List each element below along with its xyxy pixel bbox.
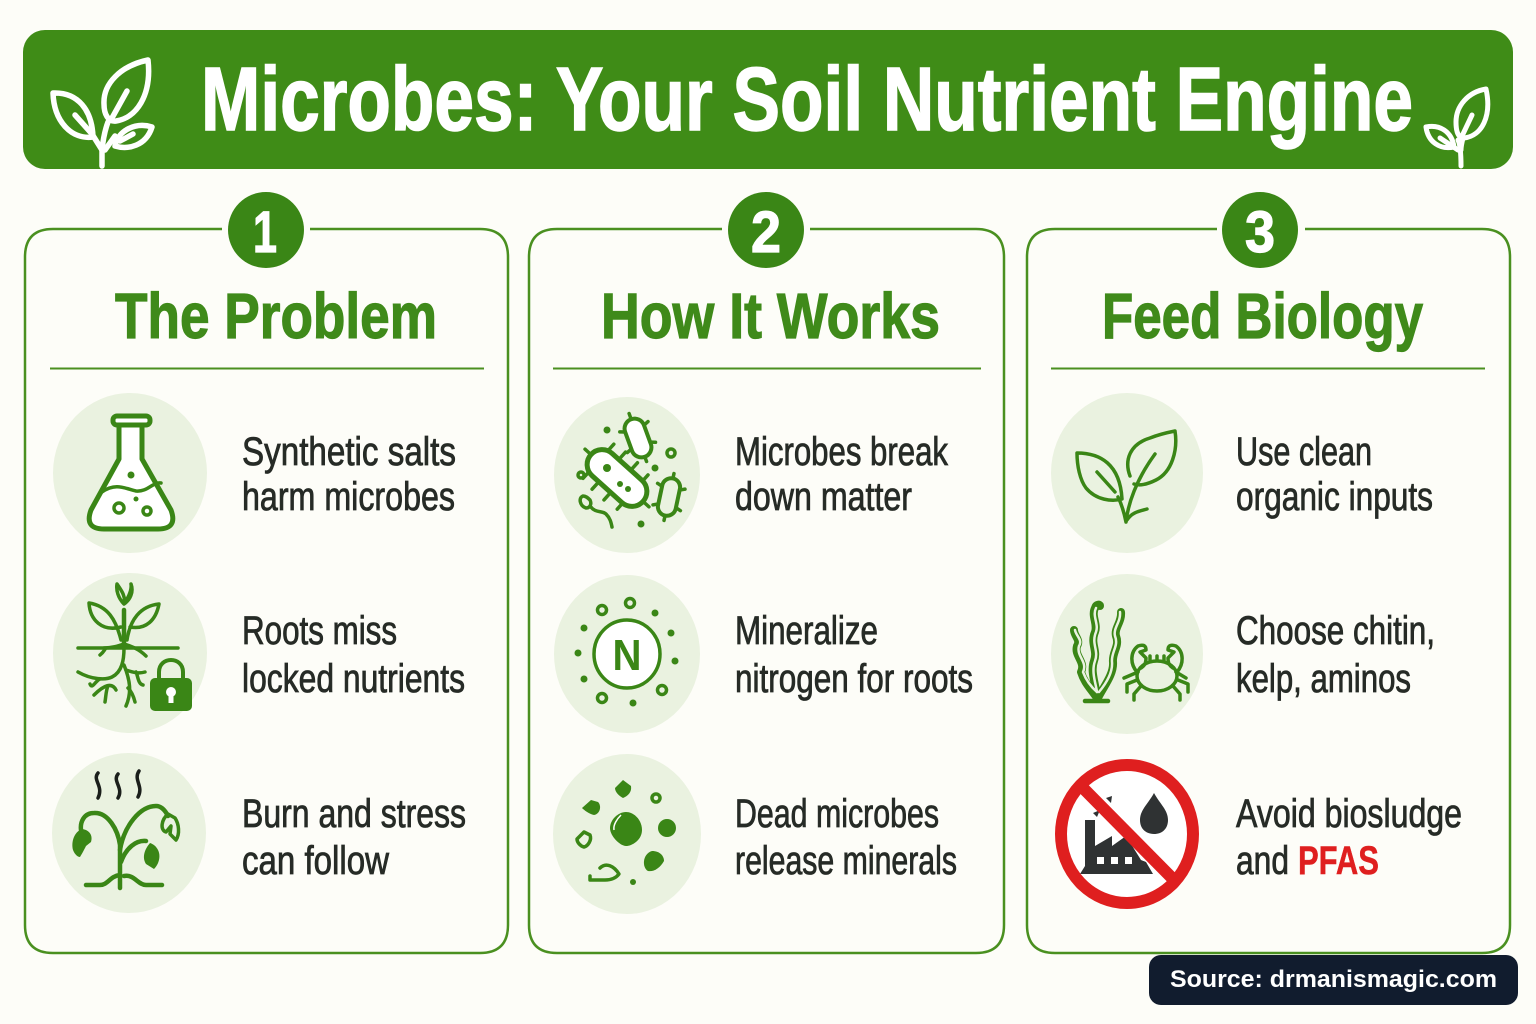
text: use clean: Use clean bbox=[1236, 430, 1372, 474]
text: choose chitin bbox=[1236, 609, 1435, 701]
source badge bbox=[1149, 955, 1518, 1005]
text: use clean bbox=[1236, 430, 1433, 519]
text: dead microbes: Dead microbes bbox=[735, 792, 939, 836]
text: microbes break bbox=[735, 430, 949, 519]
icon: no factory or sludge bbox=[1061, 765, 1193, 903]
icon: minerals bbox=[553, 754, 701, 914]
panel frame bbox=[529, 229, 1004, 953]
text: microbes break: Microbes break bbox=[735, 430, 949, 474]
panel: feed biology bbox=[1027, 192, 1510, 953]
text: microbes break: down matter bbox=[735, 475, 912, 519]
panel: the problem bbox=[25, 192, 508, 953]
text: synthetic salts: harm microbes bbox=[242, 475, 455, 519]
text: avoid biosludge bbox=[1236, 792, 1462, 883]
icon: flask bbox=[53, 393, 207, 553]
text: choose chitin: kelp, aminos bbox=[1236, 657, 1411, 701]
icon: kelp and crab bbox=[1051, 574, 1203, 734]
number badge 1 bbox=[228, 192, 304, 268]
heading: feed biology: Feed Biology bbox=[1102, 280, 1423, 352]
number badge 3: 3 bbox=[1245, 200, 1275, 265]
text: choose chitin: Choose chitin, bbox=[1236, 609, 1435, 653]
text: avoid biosludge: and bbox=[1236, 839, 1289, 883]
title banner bbox=[23, 30, 1513, 169]
panel frame bbox=[25, 229, 508, 953]
icon: nitrogen: N bbox=[612, 631, 642, 680]
icon: bacteria bbox=[554, 397, 700, 553]
text: mineralize: nitrogen for roots bbox=[735, 657, 973, 701]
number badge 1: 1 bbox=[253, 200, 277, 265]
text: mineralize bbox=[735, 609, 973, 701]
text: burn and stress bbox=[242, 792, 466, 883]
icon: nitrogen bbox=[554, 575, 700, 733]
number badge 2 bbox=[728, 192, 804, 268]
text: roots miss: locked nutrients bbox=[242, 657, 465, 701]
panel: how it works bbox=[529, 192, 1004, 953]
text: mineralize: Mineralize bbox=[735, 609, 878, 653]
source badge: Source: drmanismagic.com bbox=[1170, 966, 1497, 993]
icon: left sprout bbox=[53, 60, 152, 166]
text: avoid biosludge: Avoid biosludge bbox=[1236, 792, 1462, 836]
text: burn and stress: Burn and stress bbox=[242, 792, 466, 836]
text: roots miss: Roots miss bbox=[242, 609, 397, 653]
text: roots miss bbox=[242, 609, 465, 701]
number badge 2: 2 bbox=[751, 200, 781, 265]
icon: roots with lock bbox=[53, 573, 207, 733]
text: synthetic salts bbox=[242, 430, 456, 519]
text: dead microbes: release minerals bbox=[735, 839, 957, 883]
icon: wilted plant bbox=[52, 753, 206, 913]
panel frame bbox=[1027, 229, 1510, 953]
text: burn and stress: can follow bbox=[242, 839, 389, 883]
icon: right sprout bbox=[1426, 89, 1488, 166]
number badge 3 bbox=[1222, 192, 1298, 268]
heading: the problem: The Problem bbox=[115, 280, 437, 352]
text: PFAS: PFAS bbox=[1298, 839, 1379, 883]
text: use clean: organic inputs bbox=[1236, 475, 1433, 519]
icon: sprout bbox=[1051, 393, 1203, 553]
text: dead microbes bbox=[735, 792, 957, 883]
text: synthetic salts: Synthetic salts bbox=[242, 430, 456, 474]
heading: how it works: How It Works bbox=[601, 280, 940, 352]
